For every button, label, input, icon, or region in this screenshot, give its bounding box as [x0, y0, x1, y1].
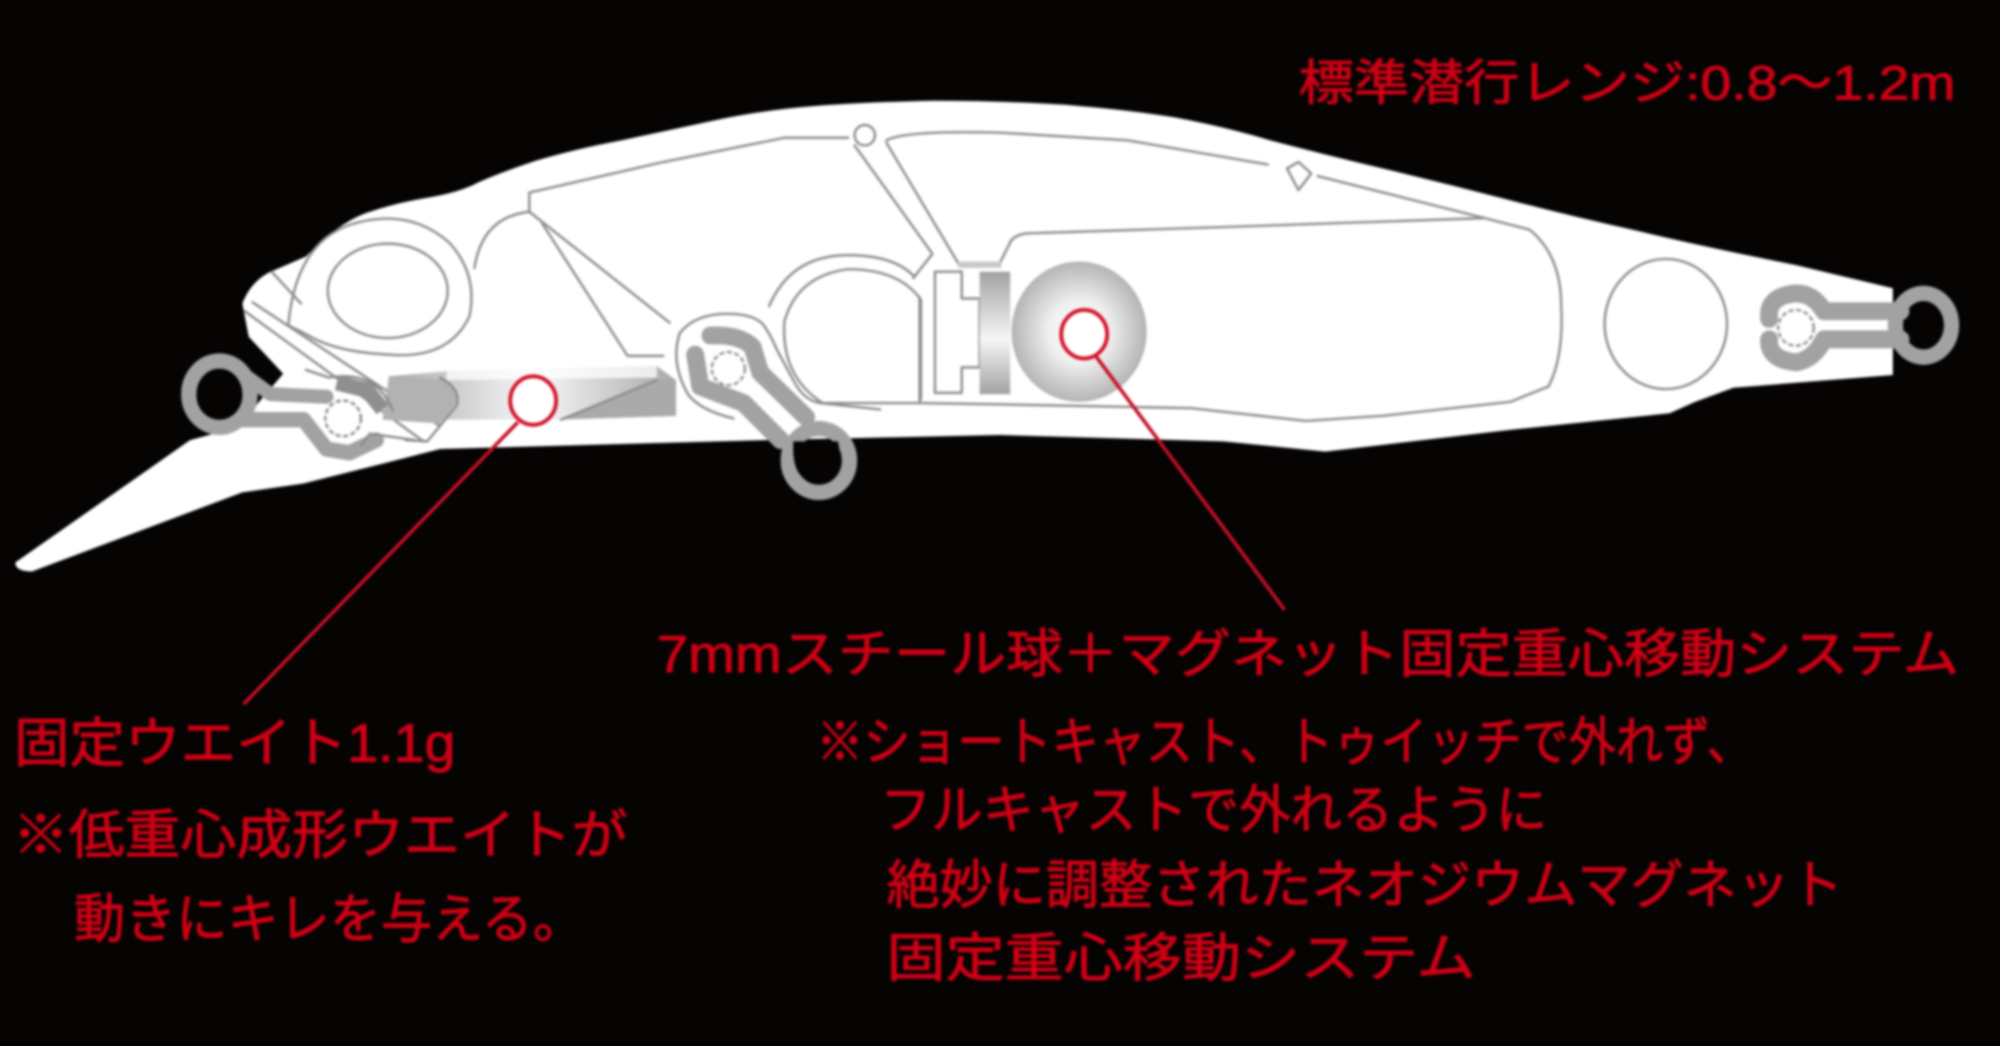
fixed weight band — [383, 366, 676, 441]
description: magnet system: 絶妙に調整されたネオジウムマグネット — [886, 857, 1843, 915]
belly hook eye — [676, 314, 880, 492]
description: magnet system: フルキャストで外れるように — [880, 782, 1547, 840]
lure diagram — [15, 101, 1952, 571]
diving range label: 標準潜行レンジ:0.8〜1.2m — [1298, 56, 1955, 110]
description: magnet system: 固定重心移動システム — [886, 930, 1476, 988]
ball chamber — [921, 218, 1562, 421]
rib struts — [855, 143, 1010, 403]
callout: steel ball marker and leader — [1061, 310, 1284, 610]
heading: steel ball system: 7mmスチール球＋マグネット固定重心移動システム — [657, 626, 1959, 684]
description: magnet system: ※ショートキャスト、トゥイッチで外れず、 — [816, 714, 1754, 772]
description: fixed weight: ※低重心成形ウエイトが — [13, 806, 628, 865]
tail chamber circle — [1605, 259, 1727, 389]
callout: fixed weight marker and leader — [244, 376, 556, 704]
structural node — [855, 125, 875, 145]
rear node — [1287, 162, 1311, 190]
H bracket — [935, 262, 1010, 394]
description: magnet system — [816, 714, 1843, 988]
heading: fixed weight: 固定ウエイト1.1g — [14, 715, 455, 774]
front upper chamber — [529, 138, 848, 323]
nose hook eye — [189, 361, 415, 453]
internal chamber lines — [474, 125, 1727, 421]
lure body silhouette — [15, 101, 1893, 571]
steel ball — [1011, 262, 1147, 402]
description: fixed weight: 動きにキレを与える。 — [74, 891, 584, 950]
nose lines — [245, 272, 440, 441]
description: fixed weight — [13, 806, 628, 950]
upper rear chamber — [886, 132, 1485, 218]
head and eye — [245, 219, 471, 441]
eye outer ring — [288, 219, 471, 355]
arch chamber — [769, 255, 921, 403]
eye inner — [328, 244, 448, 338]
tail hook eye — [1769, 293, 1952, 362]
